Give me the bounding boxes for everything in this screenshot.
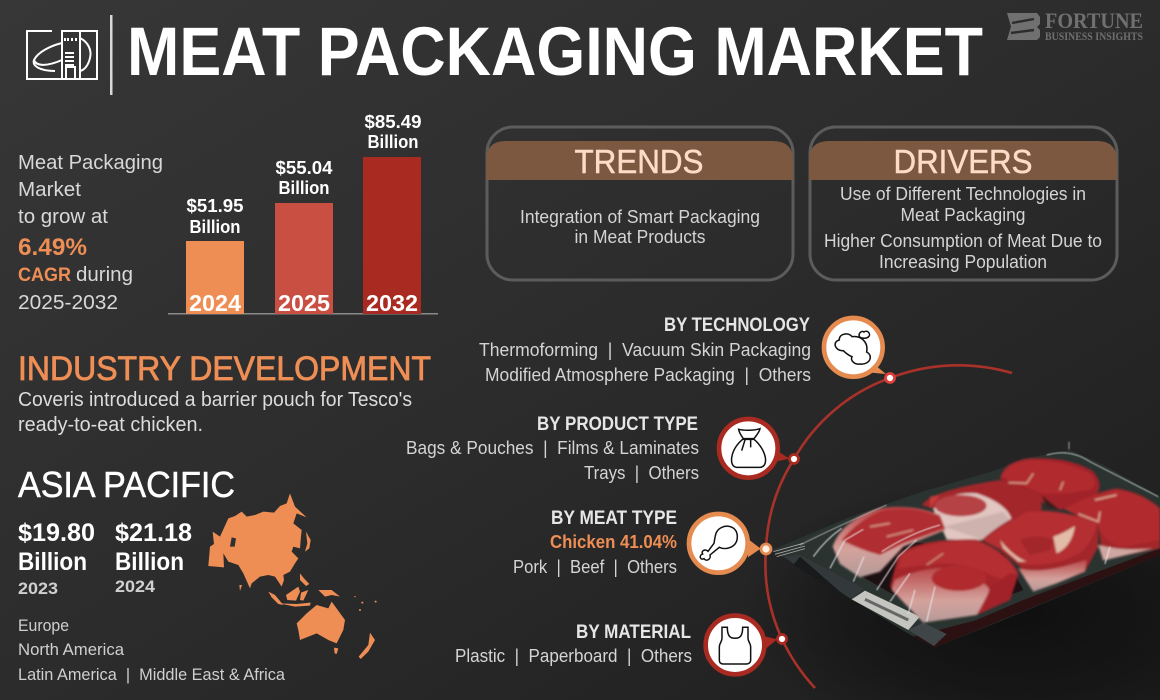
icon: cloud [835,331,870,364]
segment: by product type: Trays | Others [584,463,699,483]
text: CAGR statement: 2025-2032 [18,292,118,314]
text: other regions: North America [18,640,125,659]
arc connector [765,365,1012,688]
text: CAGR statement: to grow at [18,206,108,228]
bar 2025: Billion [278,178,330,198]
text: CAGR statement: Market [18,179,81,201]
icon: sack [732,429,766,467]
panel: drivers: Meat Packaging [900,205,1026,225]
node: meat type [761,544,771,554]
segment: by material: BY MATERIAL [576,622,691,643]
panel: drivers [809,127,1117,280]
text: CAGR statement [18,152,163,314]
segment: by meat type: Chicken 41.04% [550,532,677,552]
segment: by product type: BY PRODUCT TYPE [537,414,698,435]
panel: trends: in Meat Products [574,227,706,247]
segment: by product type: Bags & Pouches | Films & Laminates [406,438,699,458]
icon: carrier bag [719,627,751,664]
photo: vacuum-packed meat [772,442,1160,647]
badge: technology [824,318,886,377]
steak: top [1000,458,1100,510]
segment: by material [455,622,692,666]
panel: industry development [18,350,431,436]
panel: drivers: Use of Different Technologies in [840,184,1086,204]
bar 2024: 2024 [189,290,241,316]
panel: Asia Pacific figures [18,464,235,598]
panel: industry development: ready-to-eat chicken. [18,414,203,436]
text: CAGR statement: 6.49% [18,234,87,261]
text: other regions: Latin America | Middle East & Africa [18,665,286,684]
badge: meat type [689,514,761,573]
divider [110,15,112,95]
badge: product type [719,419,789,478]
segment: by meat type: BY MEAT TYPE [551,508,677,529]
map: Asia Pacific [208,493,377,659]
panel: Asia Pacific figures: $21.18 [115,519,192,547]
segment: by technology [479,315,811,385]
steak: right [1063,488,1160,561]
panel: Asia Pacific figures: Billion [115,548,184,576]
node: product type [790,454,798,464]
panel: trends: Integration of Smart Packaging [520,207,760,227]
plastic highlights [800,442,1158,622]
bar 2024: $51.95 [186,196,244,216]
panel: trends [486,127,793,280]
text: other regions: Europe [18,616,69,635]
panel: Asia Pacific figures: ASIA PACIFIC [18,464,235,505]
bar 2024: Billion [190,217,240,237]
panel: drivers: Higher Consumption of Meat Due to [824,231,1102,251]
text: other regions [18,616,286,684]
bar 2032 [363,112,422,316]
segment: by product type [406,414,699,483]
segment: by meat type: Pork | Beef | Others [513,557,677,577]
bar 2025: 2025 [278,290,330,316]
bar 2025: $55.04 [276,158,332,178]
panel: drivers: DRIVERS [894,143,1032,180]
segment: by technology: Modified Atmosphere Packaging | Others [485,365,811,385]
segment: by technology: Thermoforming | Vacuum Skin Packaging [479,340,811,360]
steak: front [890,539,1018,623]
logo: Fortune Business Insights [1007,8,1143,43]
bar 2032: $85.49 [364,112,422,132]
logo: Fortune Business Insights: FORTUNE [1045,8,1143,33]
bar 2025 [275,158,333,316]
node: material [778,634,786,644]
panel: industry development: Coveris introduced a barrier pouch for Tesco's [18,389,412,411]
segment: by technology: BY TECHNOLOGY [664,315,810,336]
icon: chicken leg [700,526,737,560]
steak: left [833,507,946,577]
panel: trends: TRENDS [574,143,704,180]
title: MEAT PACKAGING MARKET [127,13,983,90]
panel: Asia Pacific figures: 2024 [115,577,156,596]
panel: drivers: Increasing Population [879,252,1047,272]
panel: industry development: INDUSTRY DEVELOPMENT [18,350,431,388]
bar chart [168,112,438,316]
steak: centre [922,480,1042,540]
node: technology [886,374,894,382]
bar 2032: 2032 [366,290,418,316]
segment: by material: Plastic | Paperboard | Others [455,646,692,666]
panel: Asia Pacific figures: 2023 [18,579,58,598]
segment: by meat type [513,508,677,577]
panel: Asia Pacific figures: Billion [18,548,87,576]
panel: Asia Pacific figures: $19.80 [18,519,95,547]
bar 2032: Billion [368,132,418,152]
steak: middle [982,510,1098,592]
bar 2024 [186,196,244,316]
text: CAGR statement: Meat Packaging [18,152,163,174]
text: CAGR statement: CAGR [18,265,71,286]
text: CAGR statement: during [76,264,133,286]
icon: meat package [27,31,97,79]
badge: material [706,616,777,674]
